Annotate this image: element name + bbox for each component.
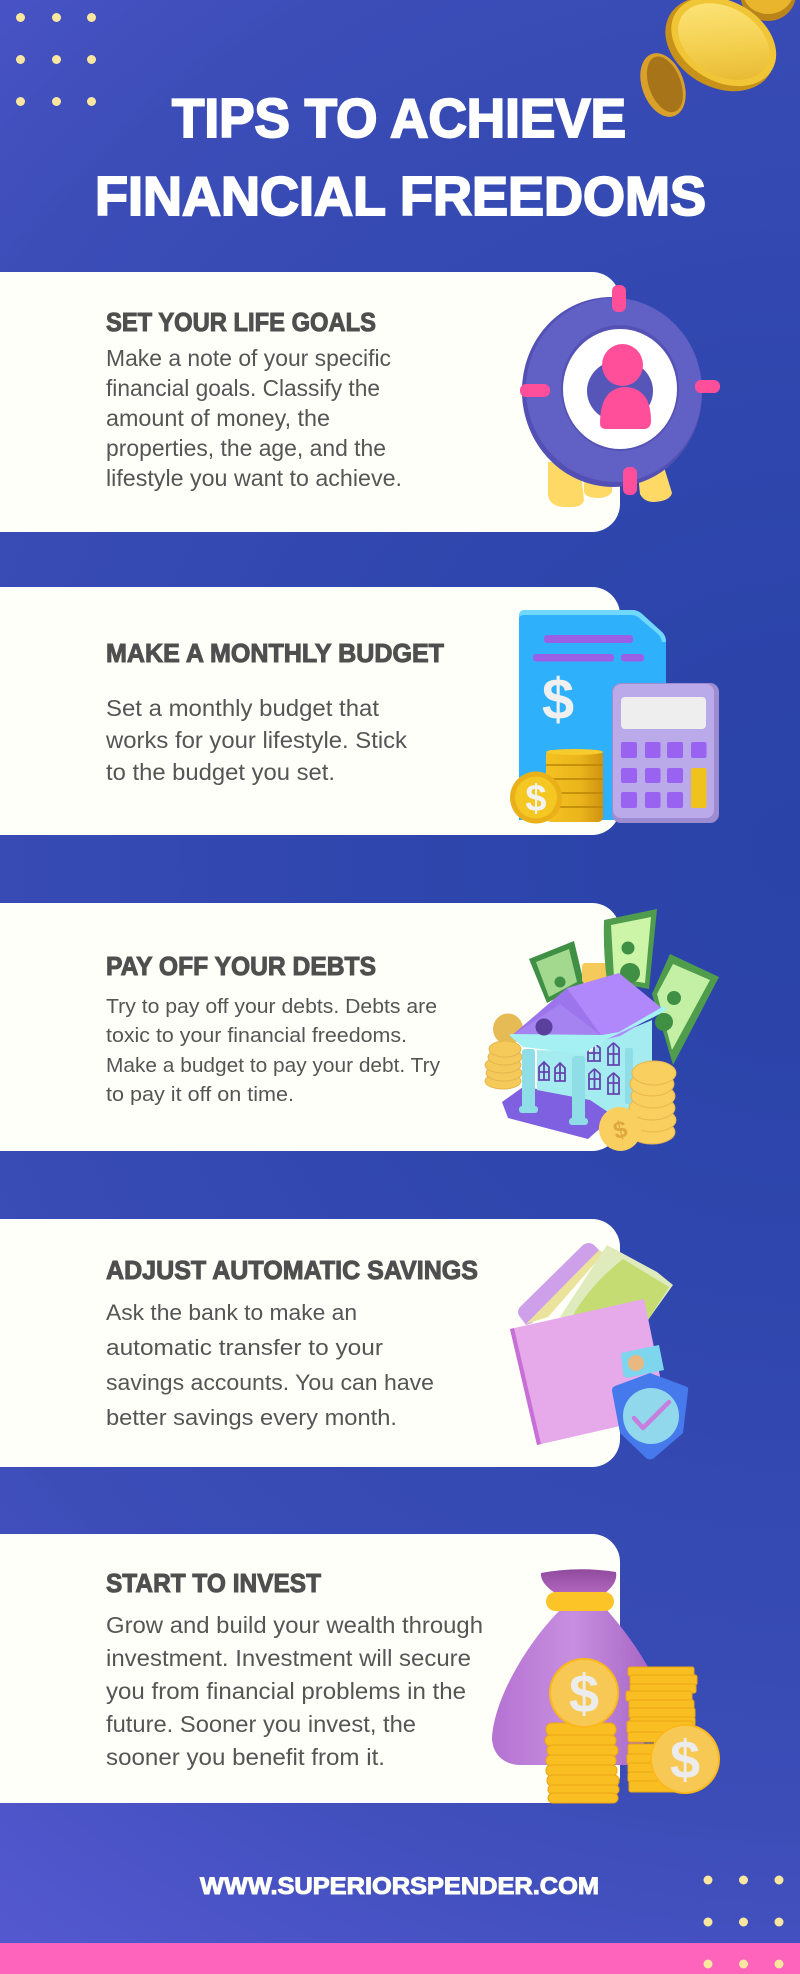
icon: budget document and calculator: $ — [542, 667, 574, 732]
heading: start to invest: START TO INVEST — [106, 1568, 321, 1598]
text block: invest: sooner you benefit from it. — [106, 1744, 385, 1770]
coin stack — [546, 749, 603, 822]
text block: invest: you from financial problems in the — [106, 1678, 466, 1704]
icon: budget document and calculator: $ — [525, 778, 547, 820]
text block: monthly budget — [105, 695, 408, 785]
icon: target with person — [513, 285, 720, 507]
dot pattern: top left — [16, 13, 96, 106]
right coin stack — [629, 1061, 676, 1144]
text block: life goals: amount of money, the — [106, 405, 330, 431]
panel: adjust automatic savings — [0, 1219, 620, 1467]
footer website link: WWW.SUPERIORSPENDER.COM — [200, 1873, 599, 1900]
panel: pay off your debts — [0, 903, 620, 1151]
title: TIPS TO ACHIEVE — [172, 87, 626, 149]
left coin stack — [545, 1723, 619, 1803]
text block: monthly budget: works for your lifestyle. Stick — [105, 727, 408, 753]
title — [95, 87, 706, 227]
bank base — [502, 1087, 630, 1139]
text block: debts: Try to pay off your debts. Debts are — [106, 996, 437, 1018]
text block: monthly budget: to the budget you set. — [106, 759, 335, 785]
icon: falling gold coins — [632, 0, 796, 123]
text block: debts: to pay it off on time. — [106, 1084, 294, 1106]
heading: adjust automatic savings: ADJUST AUTOMATIC SAVINGS — [106, 1255, 478, 1285]
text block: savings: savings accounts. You can have — [106, 1370, 434, 1395]
text block: life goals — [106, 345, 402, 491]
text block: life goals: Make a note of your specific — [106, 345, 391, 371]
text block: life goals: properties, the age, and the — [106, 435, 386, 461]
text block: savings — [106, 1300, 434, 1430]
icon: money bag with coins — [492, 1569, 720, 1803]
bank columns — [519, 1048, 633, 1125]
heading: set your life goals: SET YOUR LIFE GOALS — [106, 307, 376, 337]
text block: debts — [106, 996, 440, 1106]
text block: monthly budget: Set a monthly budget that — [106, 695, 380, 721]
icon: bank with money — [485, 909, 719, 1156]
icon: bank with money: $ — [610, 1116, 631, 1145]
icon: budget document and calculator — [510, 610, 719, 824]
text block: debts: Make a budget to pay your debt. Try — [106, 1055, 440, 1077]
dot pattern: bottom right — [704, 1876, 784, 1968]
panel: make a monthly budget — [0, 587, 620, 835]
icon: wallet with shield — [510, 1243, 688, 1460]
icon: money bag with coins: $ — [670, 1730, 700, 1790]
text block: savings: Ask the bank to make an — [106, 1300, 357, 1325]
text block: life goals: lifestyle you want to achieve. — [106, 465, 402, 491]
title: FINANCIAL FREEDOMS — [95, 165, 706, 227]
bank body — [537, 1020, 652, 1120]
bank roof — [567, 973, 664, 1040]
text block: invest: future. Sooner you invest, the — [106, 1711, 416, 1737]
pink bottom bar — [0, 1943, 800, 1974]
text block: life goals: financial goals. Classify the — [106, 375, 380, 401]
text block: savings: automatic transfer to your — [106, 1335, 383, 1360]
heading: make a monthly budget: MAKE A MONTHLY BUDGET — [106, 638, 444, 668]
text block: invest: investment. Investment will secure — [106, 1645, 471, 1671]
shield — [612, 1373, 688, 1460]
calculator — [612, 683, 719, 823]
text block: savings: better savings every month. — [106, 1405, 397, 1430]
icon: money bag with coins: $ — [569, 1664, 599, 1724]
text block: debts: toxic to your financial freedoms. — [106, 1025, 407, 1047]
text block: invest — [106, 1612, 483, 1770]
bank windows — [539, 1043, 619, 1094]
panel: set your life goals — [0, 272, 620, 532]
heading: pay off your debts: PAY OFF YOUR DEBTS — [106, 951, 376, 981]
right coin stack — [626, 1667, 697, 1792]
panel: start to invest — [0, 1534, 620, 1803]
text block: invest: Grow and build your wealth through — [106, 1612, 483, 1638]
left coins — [485, 1014, 523, 1089]
